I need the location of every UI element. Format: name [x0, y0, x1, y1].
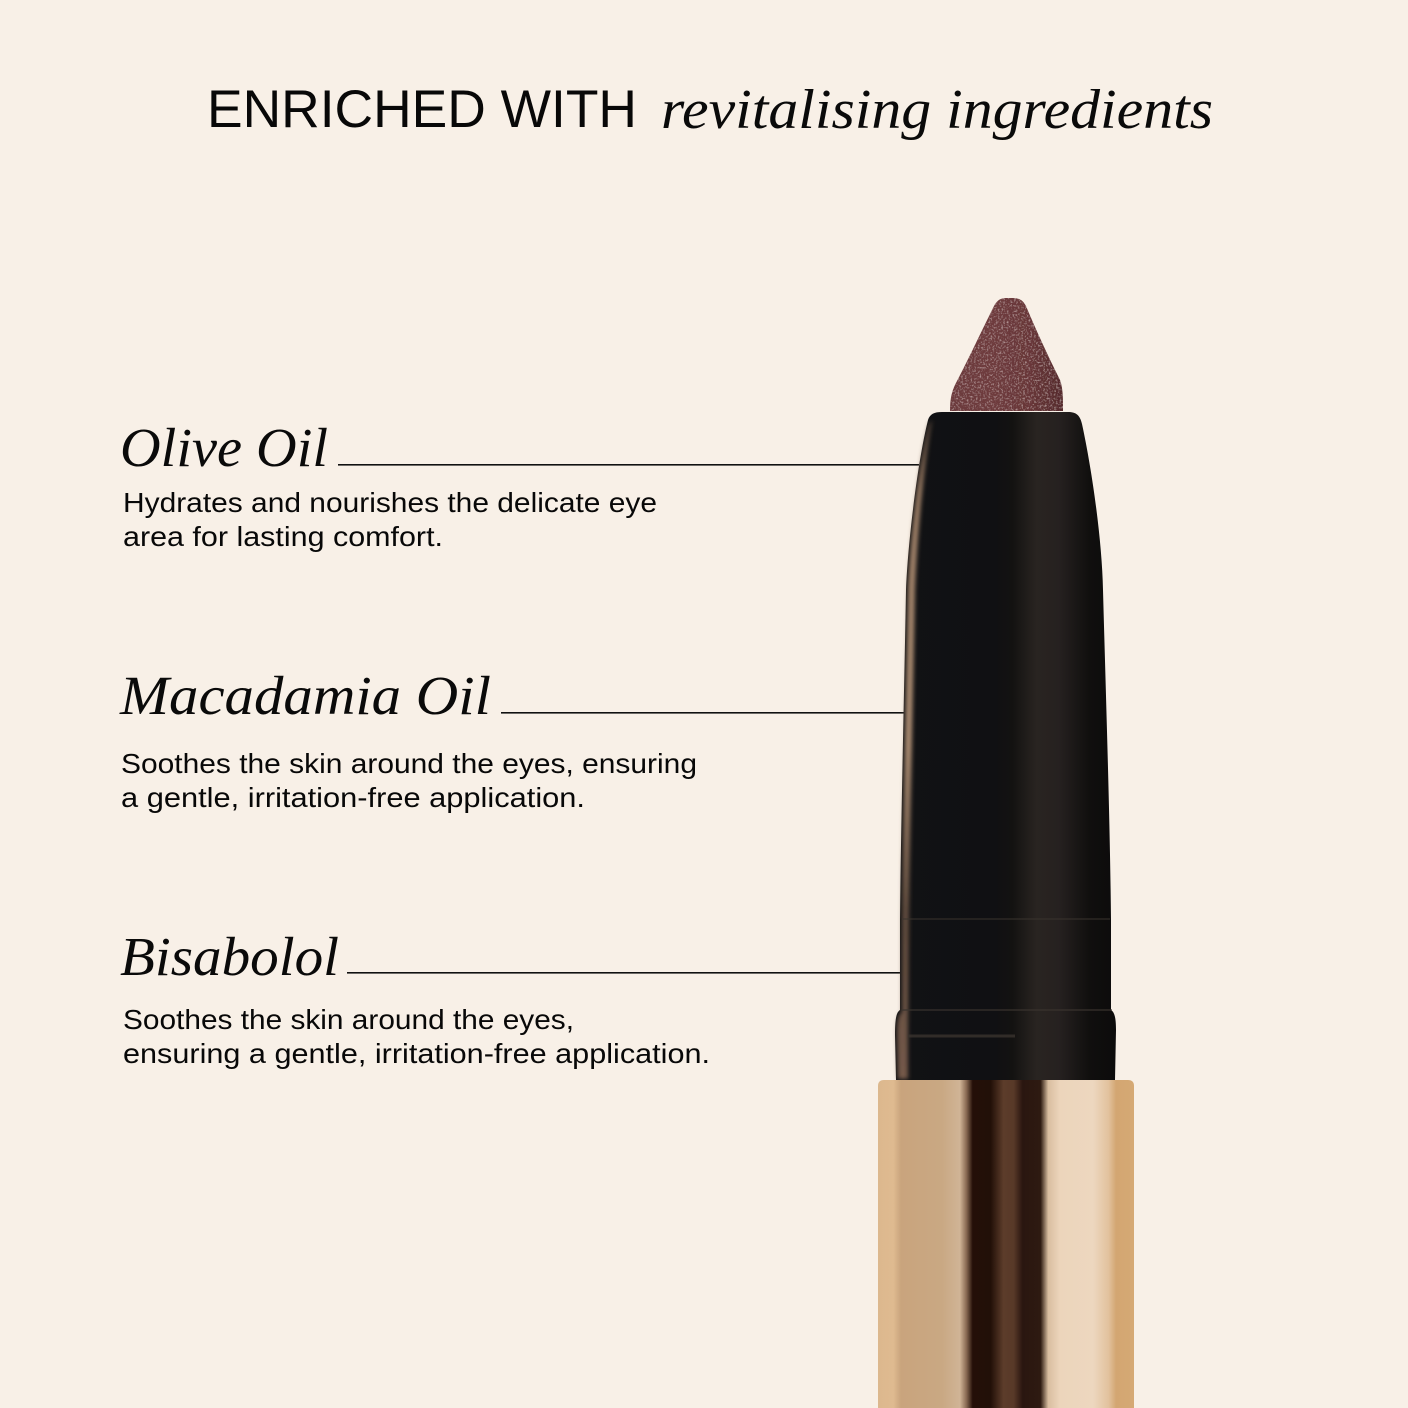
description: Olive Oil: Hydrates and nourishes the delicate eye — [123, 487, 657, 518]
barrel left edge reflection — [897, 420, 932, 1079]
title: revitalising ingredients — [661, 79, 1213, 141]
ingredient: Olive Oil — [120, 417, 919, 552]
description: Olive Oil — [123, 487, 657, 552]
description: Macadamia Oil: a gentle, irritation-free application. — [121, 782, 585, 813]
description: Bisabolol: Soothes the skin around the eyes, — [123, 1004, 574, 1035]
description: Olive Oil: area for lasting comfort. — [123, 521, 443, 552]
leader line: Olive Oil — [338, 464, 919, 466]
ingredient: Macadamia Oil — [119, 665, 905, 813]
ingredient name: Olive Oil: Olive Oil — [120, 417, 328, 478]
ingredient name: Macadamia Oil: Macadamia Oil — [119, 665, 491, 726]
description: Macadamia Oil — [121, 748, 697, 813]
gold tube — [878, 1080, 1134, 1408]
title: ENRICHED WITH — [207, 80, 637, 139]
description: Bisabolol: ensuring a gentle, irritation-free application. — [123, 1038, 710, 1069]
title — [207, 79, 1213, 141]
ingredient name: Bisabolol: Bisabolol — [120, 926, 339, 987]
description: Macadamia Oil: Soothes the skin around the eyes, ensuring — [121, 748, 697, 779]
crayon tip — [950, 298, 1063, 411]
product illustration: eye crayon — [878, 298, 1134, 1408]
leader line: Macadamia Oil — [501, 712, 905, 714]
barrel band grooves — [902, 919, 1112, 1036]
black barrel — [895, 412, 1116, 1080]
description: Bisabolol — [123, 1004, 710, 1069]
leader line: Bisabolol — [347, 972, 900, 974]
ingredient: Bisabolol — [120, 926, 900, 1069]
